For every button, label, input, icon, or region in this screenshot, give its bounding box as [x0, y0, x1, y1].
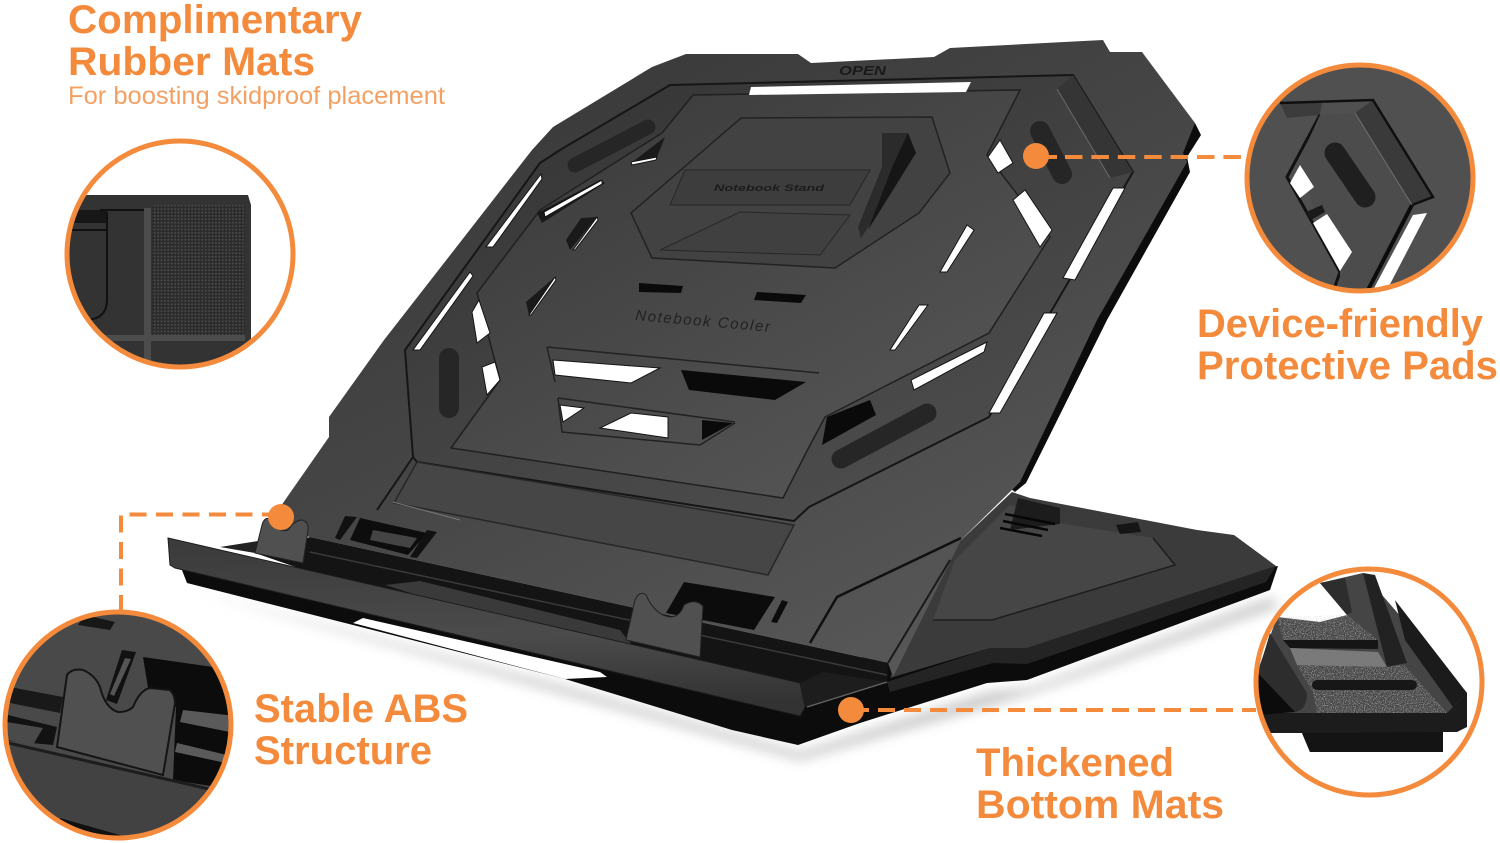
recessed slot shadows	[526, 137, 665, 315]
tray channel	[220, 537, 888, 707]
heading: Thickened Bottom Mats: Bottom Mats	[976, 783, 1224, 827]
pad hexagon band	[1057, 75, 1133, 178]
engraved OPEN label: OPEN	[839, 63, 887, 78]
inset: bottom mats	[1256, 569, 1482, 795]
laptop stand product illustration	[168, 40, 1280, 760]
black ventilation openings	[639, 283, 876, 445]
black side edge of panel	[1000, 123, 1201, 492]
callout: protective pads connector	[1023, 143, 1242, 169]
white gap under the front lip	[353, 618, 607, 679]
heading: Thickened Bottom Mats: Thickened	[976, 741, 1174, 785]
heading: Stable ABS Structure	[254, 687, 468, 773]
subheading: skidproof placement: For boosting skidproof placement	[68, 82, 445, 110]
inner plate	[451, 90, 1050, 498]
engraved Notebook Cooler label: Notebook Cooler	[635, 307, 772, 336]
centre octagon recess	[631, 117, 950, 268]
white ventilation slots	[413, 140, 1125, 438]
strut and chamfer lines	[810, 538, 961, 643]
heading: Device-friendly Protective Pads	[1197, 302, 1498, 388]
base plate	[180, 492, 1278, 745]
soft ground shadow	[190, 590, 1280, 760]
heading: Complimentary Rubber Mats: Rubber Mats	[68, 40, 315, 84]
main tilted panel	[270, 40, 1195, 677]
inset: ABS structure	[0, 605, 240, 843]
hinge pegs	[255, 518, 703, 657]
lower hinge strip	[394, 462, 794, 575]
heading: Stable ABS Structure: Stable ABS	[254, 687, 468, 731]
top slot	[749, 82, 971, 95]
heading: Thickened Bottom Mats	[976, 741, 1224, 827]
front lip	[168, 538, 805, 716]
callout: bottom mats connector	[838, 697, 1256, 723]
inset: protective pads	[1240, 60, 1480, 300]
rubber pads	[449, 127, 1062, 459]
frame ring	[405, 75, 1133, 521]
inset: rubber mats	[60, 141, 293, 385]
centre octagon recess: Notebook Stand	[714, 183, 825, 193]
callout: ABS structure connector	[121, 504, 294, 611]
heading: Device-friendly Protective Pads: Device-friendly	[1197, 302, 1484, 346]
heading: Stable ABS Structure: Structure	[254, 729, 432, 773]
heading: Device-friendly Protective Pads: Protective Pads	[1197, 344, 1498, 388]
vent recess outline	[547, 347, 819, 445]
heading: Complimentary Rubber Mats	[68, 0, 363, 84]
hinge windows	[335, 516, 788, 630]
